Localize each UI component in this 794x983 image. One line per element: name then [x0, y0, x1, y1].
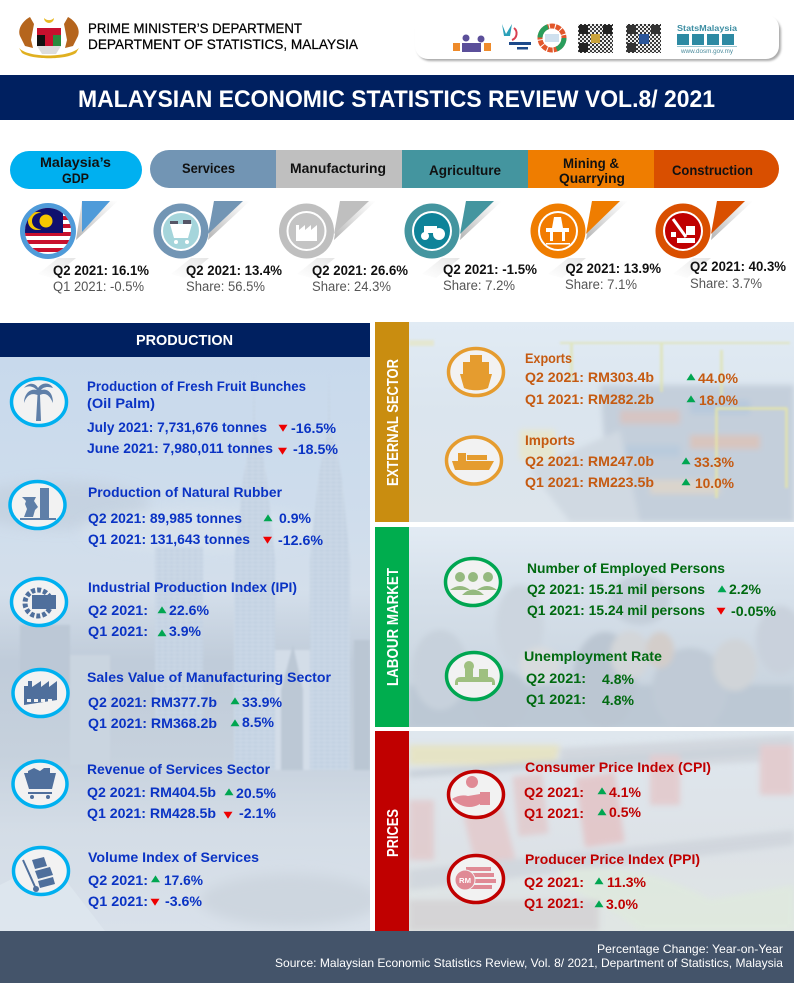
item: exports: Q1 2021: RM282.2b	[525, 391, 654, 407]
icon: Malaysian flag	[20, 203, 76, 259]
sector figure: construction: Q2 2021: 40.3%	[690, 259, 786, 274]
sector bar: Services	[182, 161, 235, 176]
icon: hand truck	[14, 848, 68, 894]
sector figure: mining and quarrying	[530, 201, 661, 292]
sector figure: services: Q2 2021: 13.4%	[186, 263, 282, 278]
item: sales value of manufacturing: Sales Value of Manufacturing Sector	[87, 669, 332, 685]
icon: oil palm	[12, 378, 66, 426]
item: employed persons	[446, 558, 777, 619]
item: employed persons: Q2 2021: 15.21 mil persons	[527, 581, 705, 597]
footer: source note: Percentage Change: Year-on-Year	[597, 942, 783, 956]
sector bar: Manufacturing	[290, 161, 386, 176]
item: industrial production index: 22.6%	[169, 602, 210, 618]
icon: rubber tapper	[10, 482, 65, 528]
item: revenue of services: -2.1%	[239, 805, 277, 821]
item: sales value of manufacturing: 33.9%	[242, 694, 283, 710]
item: imports: Q1 2021: RM223.5b	[525, 474, 654, 490]
sector bar: Construction	[672, 163, 753, 178]
pill: Malaysia's GDP	[10, 151, 142, 189]
item: unemployment rate: Q1 2021:	[526, 691, 586, 707]
item: imports: Q2 2021: RM247.0b	[525, 453, 654, 469]
item: revenue of services: Q1 2021: RM428.5b	[87, 805, 216, 821]
pill: Malaysia's GDP: GDP	[62, 171, 89, 186]
item: revenue of services: 20.5%	[236, 785, 277, 801]
item: exports: Q2 2021: RM303.4b	[525, 369, 654, 385]
sector figure: mining and quarrying: Q2 2021: 13.9%	[566, 261, 661, 276]
icon: gear factory	[12, 578, 66, 626]
panel: prices	[375, 731, 794, 931]
item: sales value of manufacturing: Q2 2021: RM377.7b	[88, 694, 217, 710]
item: revenue of services	[13, 761, 277, 821]
item: revenue of services: Revenue of Services Sector	[87, 761, 271, 777]
item: volume index of services	[14, 848, 259, 909]
item: natural rubber: Q1 2021: 131,643 tonnes	[88, 531, 250, 547]
title banner	[0, 75, 794, 120]
item: revenue of services: Q2 2021: RM404.5b	[87, 784, 216, 800]
item: fresh fruit bunches	[12, 378, 339, 457]
item: volume index of services: 17.6%	[164, 872, 204, 888]
section label: labour market: LABOUR MARKET	[385, 568, 402, 686]
section label: external sector: EXTERNAL SECTOR	[385, 359, 402, 486]
icon: hand holding coin	[448, 772, 504, 818]
sector figure: manufacturing: Q2 2021: 26.6%	[312, 263, 408, 278]
GDP figure: Q2 2021: 16.1%	[53, 263, 149, 278]
icon: oil rig	[530, 204, 586, 258]
item: exports: Exports	[525, 350, 572, 366]
item: natural rubber: -12.6%	[278, 532, 324, 548]
item: employed persons: Number of Employed Persons	[527, 560, 725, 576]
pill: Malaysia's GDP: Malaysia’s	[40, 155, 111, 170]
icon: QR code right	[626, 24, 661, 53]
title banner: MALAYSIAN ECONOMIC STATISTICS REVIEW VOL.8/ 2021	[78, 86, 715, 113]
item: unemployment rate: Q2 2021:	[526, 670, 586, 686]
item: producer price index: 3.0%	[606, 896, 639, 912]
item: fresh fruit bunches: -18.5%	[293, 441, 339, 457]
item: imports: 10.0%	[695, 475, 735, 491]
header text: ministry: PRIME MINISTER’S DEPARTMENT	[88, 20, 302, 36]
item: fresh fruit bunches: -16.5%	[291, 420, 337, 436]
icon: ringgit coins: RM	[459, 878, 471, 885]
footer: source note	[0, 931, 794, 983]
section label: external sector	[375, 322, 409, 522]
sector figure: construction: Share: 3.7%	[690, 276, 762, 291]
sector figure: agriculture: Q2 2021: -1.5%	[443, 262, 537, 277]
sector figure: mining and quarrying: Share: 7.1%	[565, 277, 637, 292]
item: fresh fruit bunches: June 2021: 7,980,011 tonnes	[87, 440, 273, 456]
icon: QR code left	[578, 24, 613, 53]
icon: MyStats Day logo	[502, 24, 531, 50]
section label: prices	[375, 731, 409, 931]
GDP figure	[20, 201, 149, 294]
panel: production	[0, 323, 380, 931]
item: exports	[448, 348, 739, 408]
sector bar	[150, 150, 779, 188]
item: producer price index: 11.3%	[607, 874, 647, 890]
item: exports: 18.0%	[699, 392, 739, 408]
item: consumer price index: Q1 2021:	[524, 805, 584, 821]
item: consumer price index: Consumer Price Index (CPI)	[525, 759, 711, 775]
sector figure: manufacturing	[279, 201, 408, 294]
background photo: crowd	[409, 527, 794, 732]
icon: crane	[656, 204, 710, 258]
icon: ringgit coins	[448, 856, 504, 902]
sector figure: manufacturing: Share: 24.3%	[312, 279, 391, 294]
item: unemployment rate: 4.8%	[602, 692, 635, 708]
item: consumer price index: Q2 2021:	[524, 784, 584, 800]
panel: labour market	[375, 527, 794, 732]
item: fresh fruit bunches: (Oil Palm)	[87, 395, 155, 411]
item: volume index of services: Q2 2021:	[88, 872, 148, 888]
icon: census logo	[453, 34, 491, 52]
item: producer price index: Q2 2021:	[524, 874, 584, 890]
GDP figure: Q1 2021: -0.5%	[53, 279, 144, 294]
item: sales value of manufacturing	[13, 669, 332, 731]
sector bar: Quarrying	[559, 171, 625, 186]
item: industrial production index: 3.9%	[169, 623, 202, 639]
panel: logos and QR codes	[415, 15, 781, 61]
background photo: KL skyline	[0, 357, 380, 931]
icon: StatsMalaysia social links: www.dosm.gov.my	[680, 49, 733, 55]
item: industrial production index: Industrial Production Index (IPI)	[88, 579, 297, 595]
item: industrial production index: Q2 2021:	[88, 602, 148, 618]
item: employed persons: -0.05%	[731, 603, 777, 619]
item: sales value of manufacturing: 8.5%	[242, 714, 275, 730]
icon: shopping cart	[13, 761, 67, 807]
item: consumer price index	[448, 759, 711, 821]
item: fresh fruit bunches: July 2021: 7,731,676 tonnes	[87, 419, 267, 435]
item: industrial production index: Q1 2021:	[88, 623, 148, 639]
item: natural rubber	[10, 482, 324, 548]
icon: factory	[279, 204, 334, 258]
item: employed persons: Q1 2021: 15.24 mil persons	[527, 602, 705, 618]
header text: ministry	[88, 20, 359, 52]
icon: tractor	[404, 204, 460, 258]
footer: source note: Source: Malaysian Economic Statistics Review, Vol. 8/ 2021, Department of Statistics, Malaysia	[275, 956, 783, 970]
item: exports: 44.0%	[698, 370, 739, 386]
icon: factory	[13, 670, 68, 716]
icon: SDG wheel	[540, 26, 564, 50]
item: employed persons: 2.2%	[729, 581, 762, 597]
icon: unemployed person at desk	[446, 652, 502, 700]
item: volume index of services: -3.6%	[165, 893, 203, 909]
icon: StatsMalaysia social links	[677, 24, 738, 55]
sector figure: agriculture	[404, 201, 537, 293]
icon: StatsMalaysia social links: StatsMalaysia	[677, 24, 738, 33]
item: imports	[446, 432, 735, 491]
item: natural rubber: Q2 2021: 89,985 tonnes	[88, 510, 242, 526]
item: sales value of manufacturing: Q1 2021: RM368.2b	[88, 715, 217, 731]
item: producer price index	[448, 851, 700, 912]
item: consumer price index: 4.1%	[609, 784, 642, 800]
item: natural rubber: 0.9%	[279, 510, 312, 526]
icon: cargo ship front	[448, 348, 504, 396]
sector figure: construction	[656, 201, 786, 291]
item: producer price index: Q1 2021:	[524, 895, 584, 911]
item: consumer price index: 0.5%	[609, 804, 642, 820]
background photo: container port	[409, 322, 794, 522]
sector figure: services	[154, 201, 282, 294]
item: unemployment rate	[446, 648, 662, 708]
section label: prices: PRICES	[385, 809, 402, 857]
item: imports: Imports	[525, 432, 575, 448]
background photo: supermarket shelf	[409, 731, 794, 931]
item: fresh fruit bunches: Production of Fresh Fruit Bunches	[87, 378, 306, 394]
sector bar: Agriculture	[429, 163, 501, 178]
sector figure: agriculture: Share: 7.2%	[443, 278, 515, 293]
icon: cargo ship side	[446, 437, 502, 484]
item: volume index of services: Volume Index of Services	[88, 849, 259, 865]
item: producer price index: Producer Price Index (PPI)	[525, 851, 700, 867]
item: unemployment rate: Unemployment Rate	[524, 648, 662, 664]
item: unemployment rate: 4.8%	[602, 671, 635, 687]
item: imports: 33.3%	[694, 454, 735, 470]
section label: labour market	[375, 527, 409, 727]
icon: shopping cart	[154, 204, 208, 258]
header text: ministry: DEPARTMENT OF STATISTICS, MALAYSIA	[88, 36, 359, 52]
sector figure: services: Share: 56.5%	[186, 279, 265, 294]
production heading	[0, 323, 370, 357]
icon: Malaysia coat of arms	[19, 17, 79, 58]
icon: three people	[446, 558, 500, 606]
sector bar: Mining &	[563, 156, 619, 171]
item: natural rubber: Production of Natural Rubber	[88, 484, 283, 500]
production heading: PRODUCTION	[136, 332, 233, 349]
panel: external sector	[375, 322, 794, 522]
item: industrial production index	[12, 578, 297, 639]
item: volume index of services: Q1 2021:	[88, 893, 148, 909]
